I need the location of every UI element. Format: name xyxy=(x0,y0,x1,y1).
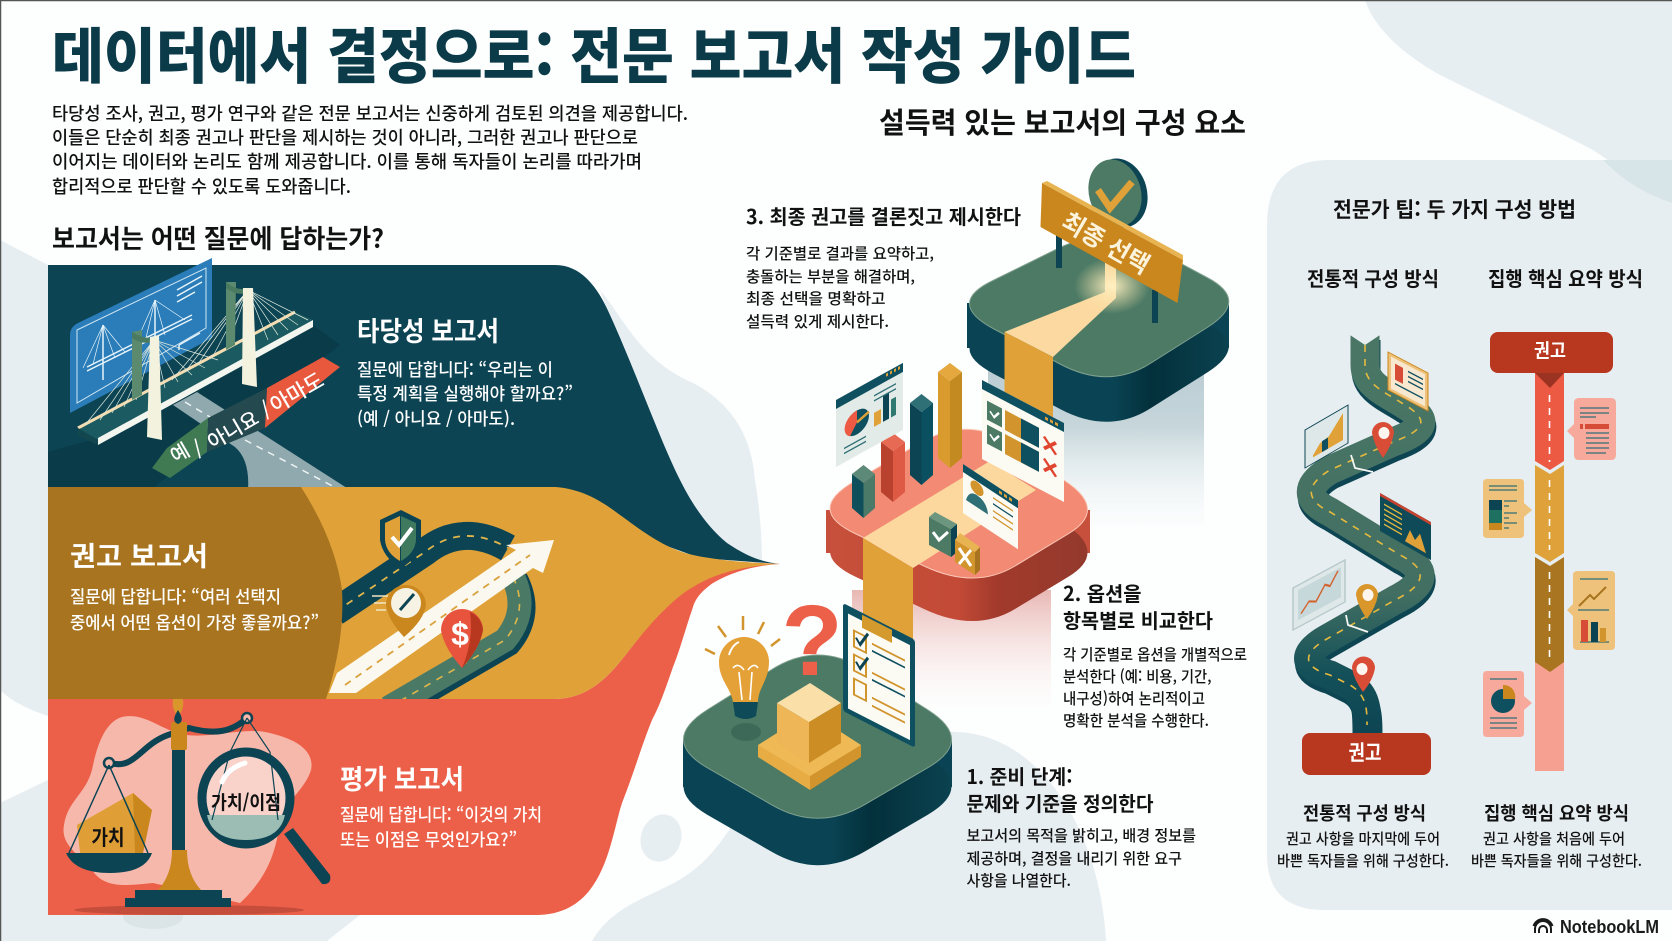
text: evaluation report xyxy=(340,758,542,852)
platform 1: preparation xyxy=(683,585,952,865)
text: recommendation report: 권고 보고서 xyxy=(70,535,208,574)
icon: scale and magnifier xyxy=(63,689,330,915)
box: recommendation at top xyxy=(1490,332,1613,373)
step 2 text: 명확한 분석을 수행한다. xyxy=(1063,709,1209,731)
step 2 text: 분석한다 (예: 비용, 기간, xyxy=(1063,665,1212,687)
step 2 text: 2. 옵션을 xyxy=(1063,578,1142,607)
bridge shadow xyxy=(48,325,340,490)
caption: traditional xyxy=(1277,800,1449,871)
icon: yes no maybe sign: / xyxy=(187,433,208,462)
caption: traditional: 권고 사항을 마지막에 두어 xyxy=(1286,828,1440,849)
icon: check medal xyxy=(1081,152,1155,234)
step 1 text: 문제와 기준을 정의한다 xyxy=(966,788,1154,817)
step 3 text xyxy=(746,201,1021,332)
step 2 text: 항목별로 비교한다 xyxy=(1063,605,1213,634)
icon: checklist screen xyxy=(982,380,1064,502)
icon: gauge pin xyxy=(372,585,426,637)
caption: traditional: 전통적 구성 방식 xyxy=(1303,800,1426,826)
icon: dark report screen xyxy=(1380,493,1431,560)
text: feasibility report: 타당성 보고서 xyxy=(357,310,499,349)
intro paragraph: 이들은 단순히 최종 권고나 판단을 제시하는 것이 아니라, 그러한 권고나 판단으로 xyxy=(52,124,638,150)
box: recommendation at top: 권고 xyxy=(1534,336,1566,363)
intro paragraph: 이어지는 데이터와 논리도 함께 제공합니다. 이를 통해 독자들이 논리를 따라가며 xyxy=(52,148,642,174)
icon: white arrow xyxy=(329,540,554,693)
shadows under platforms xyxy=(852,330,1204,707)
text: evaluation report: 평가 보고서 xyxy=(340,758,464,797)
platform 3: final choice xyxy=(967,152,1229,425)
icon: rising line chart xyxy=(1293,560,1345,630)
panel: expert tips xyxy=(1267,160,1672,910)
callout: summary page xyxy=(1567,398,1616,460)
step 3 text: 각 기준별로 결과를 요약하고, xyxy=(746,242,934,264)
text: feasibility report: (예 / 아니요 / 아마도). xyxy=(357,406,515,431)
icon: dollar pin: $ xyxy=(451,616,469,652)
icon: gold pedestal xyxy=(758,683,861,790)
box: recommendation at end xyxy=(1302,733,1431,775)
intro paragraph xyxy=(52,100,688,199)
step 1 text: 1. 준비 단계: xyxy=(966,761,1072,790)
step 3 text: 충돌하는 부분을 해결하며, xyxy=(746,265,915,287)
heading: traditional: 전통적 구성 방식 xyxy=(1307,263,1439,292)
heading: executive summary: 집행 핵심 요약 방식 xyxy=(1488,263,1643,292)
light path xyxy=(1004,262,1116,357)
callout: data page xyxy=(1483,479,1532,538)
icon: dashboard screen xyxy=(836,363,903,467)
icon: clipboard xyxy=(843,603,915,748)
text: recommendation report: 질문에 답합니다: “여러 선택지 xyxy=(70,584,281,609)
icon: profile screen xyxy=(963,464,1018,549)
text: feasibility report: 질문에 답합니다: “우리는 이 xyxy=(357,357,553,382)
icon: red pin xyxy=(1372,422,1394,458)
icon: yes no maybe sign xyxy=(152,357,340,478)
sign: final choice xyxy=(1040,181,1183,303)
step 3 text: 최종 선택을 명확하고 xyxy=(746,287,886,309)
icon: gold pin xyxy=(1356,584,1378,619)
heading: expert tips: 전문가 팁: 두 가지 구성 방법 xyxy=(1333,194,1576,224)
intro paragraph: 타당성 조사, 권고, 평가 연구와 같은 전문 보고서는 신중하게 검토된 의견을 제공합니다. xyxy=(52,100,688,126)
icon: yes no maybe sign: 아니요 xyxy=(201,402,263,455)
icon: roads xyxy=(335,536,524,712)
title: 데이터에서 결정으로: 전문 보고서 작성 가이드 xyxy=(52,9,1136,96)
icon: scale and magnifier: 가치 xyxy=(92,822,124,852)
icon: scale and magnifier: 가치/이점 xyxy=(211,788,281,815)
icon: shield xyxy=(380,510,421,568)
step 1 text: 사항을 나열한다. xyxy=(966,869,1071,891)
icon: yes no maybe sign: 예 xyxy=(164,435,194,469)
text: evaluation report: 또는 이점은 무엇인가요?” xyxy=(340,827,517,852)
icon: line chart screen xyxy=(1305,405,1348,468)
caption: traditional: 바쁜 독자들을 위해 구성한다. xyxy=(1277,850,1449,871)
step 2 text xyxy=(1063,578,1247,731)
icon: yes no maybe sign: 아마도 xyxy=(264,365,329,420)
icon: check and cross cubes xyxy=(929,512,980,575)
icon: dollar pin xyxy=(441,609,483,668)
step 3 text: 설득력 있게 제시한다. xyxy=(746,310,889,332)
box: recommendation at end: 권고 xyxy=(1348,737,1382,767)
step 1 text xyxy=(966,761,1196,891)
heading: elements of a persuasive report: 설득력 있는 보고서의 구성 요소 xyxy=(879,100,1246,142)
caption: executive summary: 권고 사항을 처음에 두어 xyxy=(1483,828,1625,849)
sign: final choice: 최종 선택 xyxy=(1056,203,1157,282)
icon: question mark: ? xyxy=(781,585,843,697)
icon: roads under bridge xyxy=(173,392,350,490)
icon: light bulb xyxy=(705,616,780,741)
icon: sign posts xyxy=(1059,235,1155,323)
step 1 text: 제공하며, 결정을 내리기 위한 요구 xyxy=(966,847,1182,869)
step 2 text: 각 기준별로 옵션을 개별적으로 xyxy=(1063,643,1247,665)
heading: question section: 보고서는 어떤 질문에 답하는가? xyxy=(52,219,384,256)
icon: bar chart xyxy=(852,363,962,518)
icon: final red pin xyxy=(1352,656,1375,692)
text: evaluation report: 질문에 답합니다: “이것의 가치 xyxy=(340,802,542,827)
caption: executive summary xyxy=(1471,800,1642,871)
chart: winding road to recommendation xyxy=(1293,328,1431,775)
text: recommendation report xyxy=(70,535,319,635)
text: recommendation report: 중에서 어떤 옵션이 가장 좋을까요?” xyxy=(70,610,319,635)
text: feasibility report: 특정 계획을 실행해야 할까요?” xyxy=(357,381,573,406)
chart: executive summary column xyxy=(1483,332,1616,771)
panel: evaluation report band xyxy=(48,560,780,915)
step 1 text: 보고서의 목적을 밝히고, 배경 정보를 xyxy=(966,824,1196,846)
icon: bridge and blueprint xyxy=(70,258,313,445)
icon: yes no maybe sign: / xyxy=(255,394,276,423)
caption: executive summary: 집행 핵심 요약 방식 xyxy=(1484,800,1629,826)
text: feasibility report xyxy=(357,310,573,431)
intro paragraph: 합리적으로 판단할 수 있도록 도와줍니다. xyxy=(52,173,351,199)
caption: executive summary: 바쁜 독자들을 위해 구성한다. xyxy=(1471,850,1642,871)
panel: recommendation report band xyxy=(48,487,780,712)
callout: pie chart page xyxy=(1483,671,1532,737)
gold column between step 1 and step 2 xyxy=(863,538,913,660)
logo: NotebookLM: NotebookLM xyxy=(1560,917,1659,937)
platform 2: comparison xyxy=(826,363,1090,660)
recommendation left panel xyxy=(48,487,342,699)
step 2 text: 내구성)하여 논리적이고 xyxy=(1063,687,1205,709)
panel: feasibility report band xyxy=(48,258,780,564)
icon: report thumbnail xyxy=(1388,352,1428,411)
step 3 text: 3. 최종 권고를 결론짓고 제시한다 xyxy=(746,201,1021,230)
callout: trend chart page xyxy=(1567,571,1615,650)
